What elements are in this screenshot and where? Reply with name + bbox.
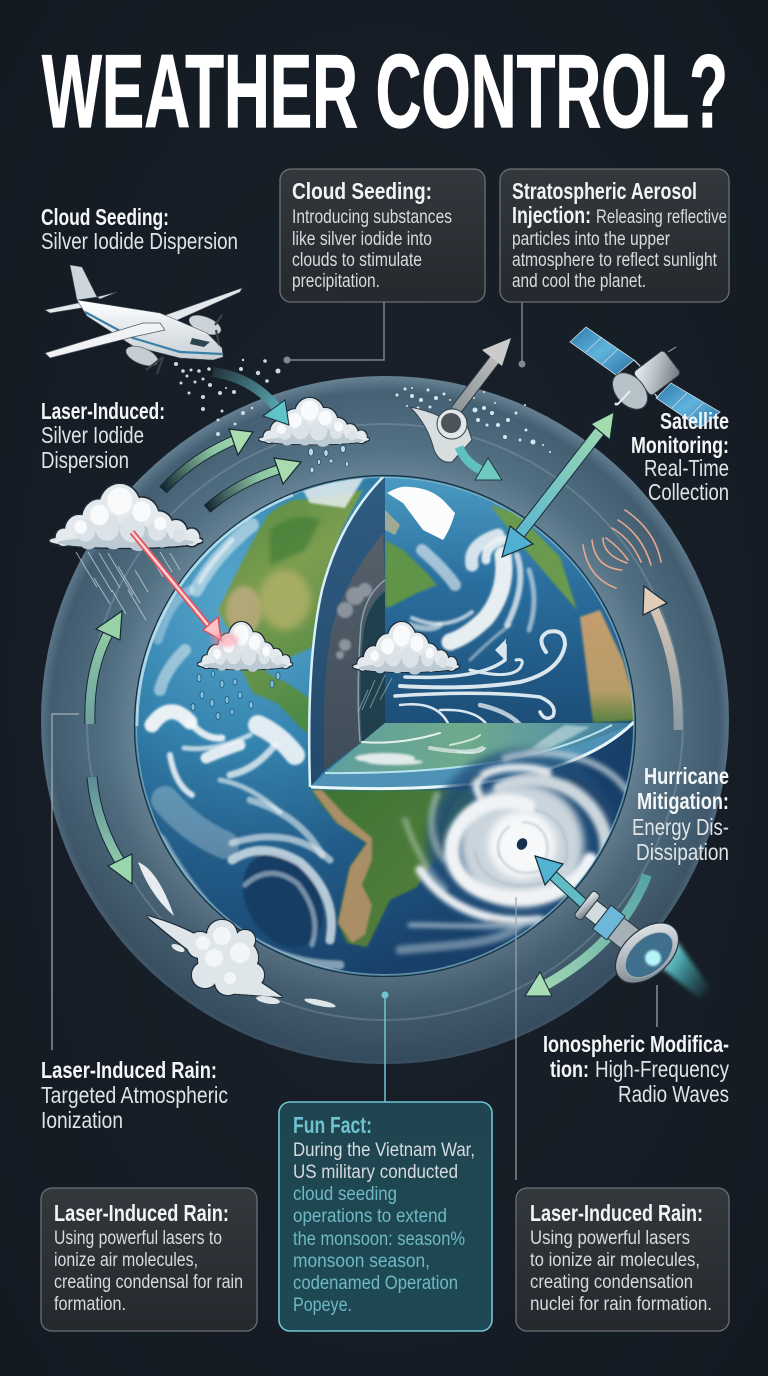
panel: fun fact: Fun Fact:: [293, 1112, 372, 1138]
rain drops near cloud: [308, 446, 348, 473]
label: cloud seeding: Cloud Seeding:: [41, 204, 169, 230]
label: satellite monitoring: Monitoring:: [631, 432, 729, 458]
label: hurricane mitigation: Energy Dis-: [632, 814, 729, 840]
arrow: beige up: [643, 586, 678, 730]
cloud: laser target: [50, 484, 202, 551]
atmosphere disc: [41, 376, 729, 1064]
panel: fun fact: Popeye.: [293, 1295, 352, 1316]
north america land: [218, 476, 365, 735]
cloud in wedge: [353, 622, 459, 675]
label: ionospheric modification: [543, 1031, 729, 1107]
aerosol particles: [396, 387, 551, 453]
panel: cloud seeding: Cloud Seeding:: [292, 178, 432, 204]
greenland: [387, 487, 455, 540]
wedge front band: [310, 723, 634, 789]
label: satellite monitoring: Real-Time: [644, 455, 729, 481]
panel: laser-induced rain left: [41, 1188, 257, 1331]
label: laser-induced: Laser-Induced:: [41, 398, 165, 424]
wedge floor: [325, 723, 634, 773]
cloud: seeded: [259, 398, 369, 447]
panel: fun fact: monsoon season,: [293, 1251, 430, 1272]
connector: right box: [515, 897, 517, 1180]
panel: laser-induced rain left: Using powerful lasers to: [54, 1228, 222, 1249]
wedge wind lines: [393, 629, 567, 723]
rain from left cloud: [76, 552, 180, 620]
wedge rain: [358, 675, 392, 712]
connector: left laser label: [52, 714, 79, 1050]
panel: fun fact: During the Vietnam War,: [293, 1140, 475, 1161]
panel: cloud seeding: like silver iodide into: [292, 229, 432, 250]
icon: satellite: [570, 327, 720, 428]
panel: laser-induced rain left: formation.: [54, 1294, 126, 1315]
label: hurricane mitigation: [632, 763, 729, 865]
label: satellite monitoring: Satellite: [660, 408, 729, 434]
panel: cloud seeding: Introducing substances: [292, 207, 452, 228]
africa land: [580, 610, 640, 723]
panel: fun fact: operations to extend: [293, 1206, 447, 1227]
arrow: teal from plane: [213, 372, 289, 425]
label: laser-induced rain: [41, 1057, 228, 1133]
arrow: green upper 1: [163, 429, 253, 490]
panel: laser-induced rain right: [516, 1188, 729, 1331]
panel: fun fact: US military conducted: [293, 1162, 458, 1183]
wedge left wall: [309, 475, 385, 787]
connector: stratospheric: [518, 302, 526, 368]
panel: stratospheric aerosol injection: particles into the upper: [512, 229, 671, 250]
hurricane: [400, 749, 626, 950]
panel: laser-induced rain left: creating condensal for rain: [54, 1272, 243, 1293]
wedge grey stratum: [324, 533, 385, 770]
panel: fun fact: cloud seeding: [293, 1184, 397, 1205]
wedge grey clouds: [336, 583, 372, 659]
eastern canada land: [385, 540, 437, 607]
signal arcs: [583, 510, 661, 588]
panel: stratospheric aerosol injection: and cool the planet.: [512, 271, 646, 292]
silver iodide particles: [174, 359, 280, 436]
atlantic storm clouds: [410, 535, 534, 660]
icon: airplane: [45, 265, 242, 374]
label: satellite monitoring: [631, 408, 729, 505]
panel: laser-induced rain right: Laser-Induced Rain:: [530, 1200, 703, 1226]
label: laser-induced rain: Targeted Atmospheric: [41, 1082, 228, 1108]
arrow: blue toward hurricane: [535, 856, 585, 905]
connector: fun fact: [382, 992, 388, 1102]
panel: fun fact: the monsoon: season%: [293, 1229, 465, 1250]
label: ionospheric modification: High-Frequency: [595, 1056, 729, 1082]
wedge dark inner wall: [360, 592, 385, 742]
cloud: lower left large: [138, 862, 336, 1009]
panel: laser-induced rain left: ionize air molecules,: [54, 1250, 198, 1271]
panel: laser-induced rain right: creating condensation: [530, 1272, 693, 1293]
label: laser-induced rain: Ionization: [41, 1107, 123, 1133]
arrow: teal from nozzle: [459, 447, 502, 480]
arrow: lower right curved: [525, 875, 647, 996]
label: laser-induced: Dispersion: [41, 447, 129, 473]
lower-left swirl: [160, 837, 340, 965]
arrow: green upper 2: [207, 458, 301, 509]
label: cloud seeding: Silver Iodide Dispersion: [41, 228, 238, 254]
panel: laser-induced rain left: Laser-Induced Rain:: [54, 1200, 229, 1226]
cloud: on globe: [198, 622, 292, 672]
panel: laser-induced rain right: Using powerful lasers: [530, 1228, 690, 1249]
arrow: laser beam: [132, 532, 239, 647]
wedge interior ocean: [385, 470, 640, 723]
panel: fun fact: [279, 1102, 492, 1331]
europe and west africa land: [490, 505, 577, 610]
device: ionospheric emitter: [574, 890, 714, 1006]
label: ionospheric modification: tion:: [550, 1056, 589, 1082]
panel: stratospheric aerosol injection: Stratospheric Aerosol: [512, 178, 697, 204]
arrow: left green down: [92, 777, 132, 884]
connector: cloud seeding: [284, 302, 384, 364]
left-side clouds: [152, 525, 322, 855]
label: laser-induced: Silver Iodide: [41, 422, 144, 448]
rain on globe: [191, 671, 280, 720]
arrow: left green up: [90, 611, 122, 724]
label: laser-induced: [41, 398, 165, 473]
label: cloud seeding: [41, 204, 238, 254]
label: satellite monitoring: Collection: [648, 479, 729, 505]
panel: stratospheric aerosol injection: atmosphere to reflect sunlight: [512, 250, 718, 271]
panel: stratospheric aerosol injection: Releasing reflective: [596, 207, 727, 228]
globe: [130, 470, 640, 985]
label: laser-induced rain: Laser-Induced Rain:: [41, 1057, 217, 1083]
label: ionospheric modification: Radio Waves: [618, 1081, 729, 1107]
south america land: [312, 790, 473, 947]
panel: cloud seeding: clouds to stimulate: [292, 250, 422, 271]
label: hurricane mitigation: Hurricane: [644, 763, 729, 789]
label: hurricane mitigation: Dissipation: [636, 839, 729, 865]
panel: laser-induced rain right: to ionize air molecules,: [530, 1250, 700, 1271]
panel: cloud seeding: precipitation.: [292, 271, 380, 292]
dispersal nozzle: [410, 407, 472, 462]
panel: laser-induced rain right: nuclei for rain formation.: [530, 1294, 712, 1315]
arrow: grey upward: [456, 338, 511, 410]
panel: fun fact: codenamed Operation: [293, 1273, 458, 1294]
arrow: satellite double: [502, 412, 614, 557]
panel: cloud seeding: [280, 169, 485, 302]
panel: stratospheric aerosol injection: Injection:: [512, 202, 591, 228]
connector: ionospheric: [656, 985, 658, 1027]
panel: stratospheric aerosol injection: [500, 169, 729, 302]
label: hurricane mitigation: Mitigation:: [637, 788, 729, 814]
